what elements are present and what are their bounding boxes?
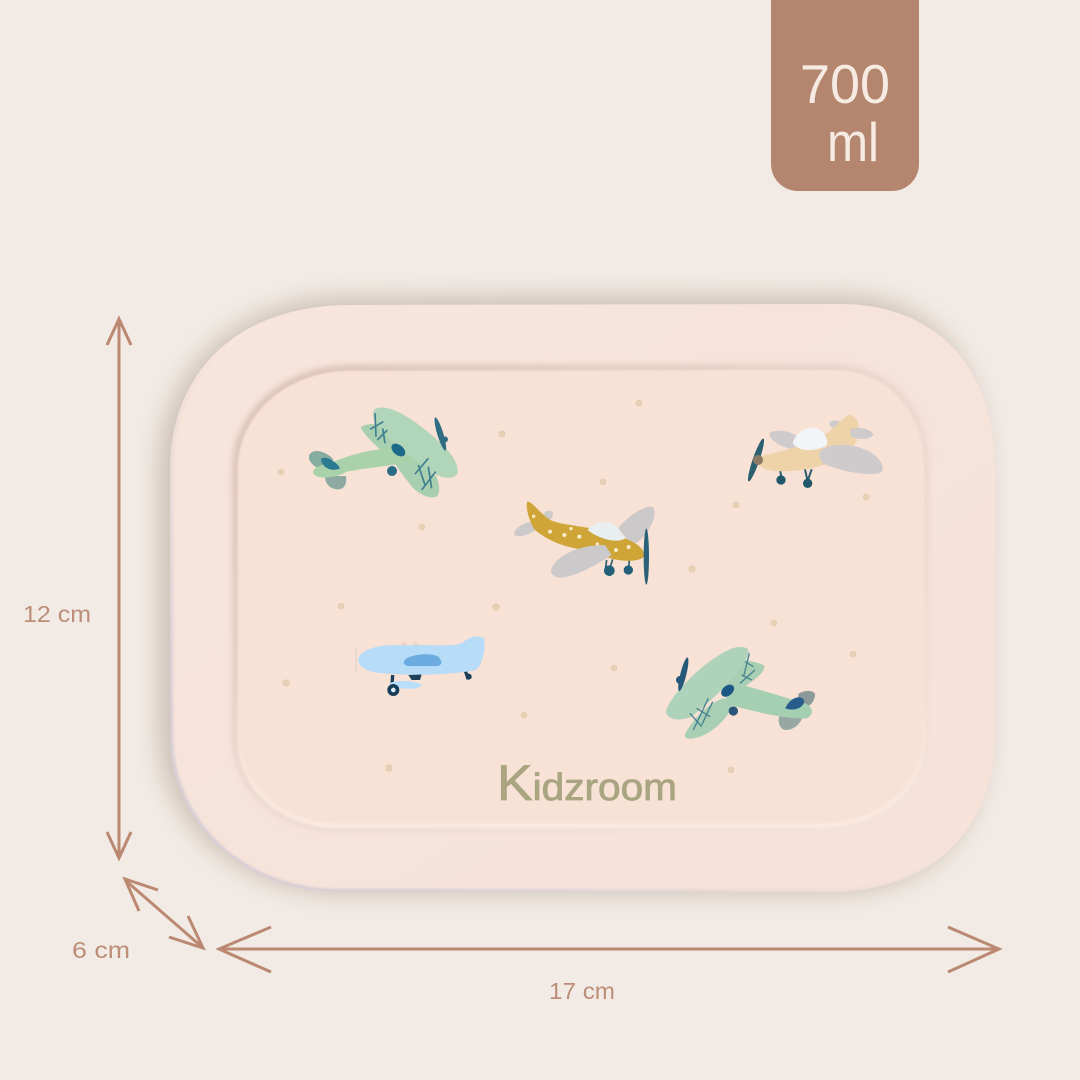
label: 12 cm: 12 cm (23, 601, 91, 627)
arrow: depth 6 cm (125, 879, 203, 948)
volume badge: ml (827, 111, 879, 173)
speckle dots (278, 400, 869, 773)
airplane: green biplane bottom right (666, 647, 815, 739)
arrow: width 17 cm (219, 927, 999, 972)
brand logo: Kidzroom: Kidzroom (497, 755, 677, 811)
airplane: green biplane top left (309, 407, 458, 497)
arrow: height 12 cm (107, 319, 131, 858)
airplane: blue plane left (356, 636, 485, 696)
lunch box lid (160, 297, 995, 892)
label: 6 cm: 6 cm (72, 937, 130, 963)
airplane: yellow plane centre (514, 502, 655, 585)
label: 17 cm: 17 cm (549, 978, 615, 1004)
volume badge: 700 (800, 53, 890, 115)
airplane: beige plane top right (745, 415, 883, 488)
volume badge (771, 0, 919, 191)
